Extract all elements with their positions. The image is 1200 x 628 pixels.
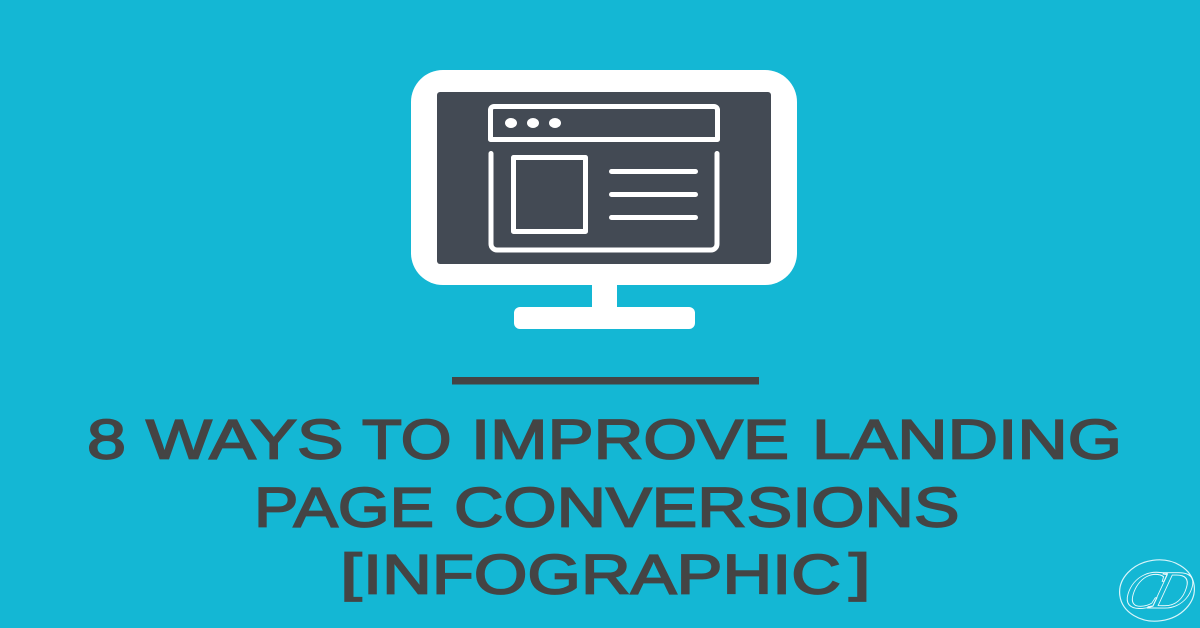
title line 3: ] — [849, 544, 871, 602]
title line 2: PAGE — [254, 476, 434, 538]
title line 1: LANDING — [812, 408, 1122, 470]
monitor stand neck — [592, 280, 617, 310]
logo: CD monogram — [1116, 555, 1200, 626]
image placeholder — [514, 158, 586, 232]
title line 1: 8 — [87, 408, 126, 470]
title line 1 — [87, 408, 1122, 470]
logo letters: D — [1144, 560, 1200, 620]
title line 2 — [254, 476, 960, 538]
monitor screen — [437, 92, 771, 264]
icon: desktop monitor — [411, 70, 797, 329]
logo letters: C — [1118, 560, 1172, 620]
monitor frame — [411, 70, 797, 285]
title line 1: WAYS — [146, 408, 344, 470]
title line 2: CONVERSIONS — [454, 476, 960, 538]
divider rule — [452, 377, 759, 384]
title line 3: INFOGRAPHIC — [363, 542, 841, 606]
browser window dots — [505, 118, 561, 128]
logo letters — [1118, 560, 1200, 620]
title line 1: IMPROVE — [471, 408, 789, 470]
title — [87, 408, 1122, 606]
monitor stand base — [514, 307, 695, 329]
browser page body — [491, 154, 717, 250]
title line 1: TO — [362, 408, 452, 470]
logo ring — [1116, 555, 1198, 626]
title line 3: [ — [340, 544, 363, 602]
browser title bar — [490, 106, 718, 140]
text lines — [612, 172, 696, 218]
